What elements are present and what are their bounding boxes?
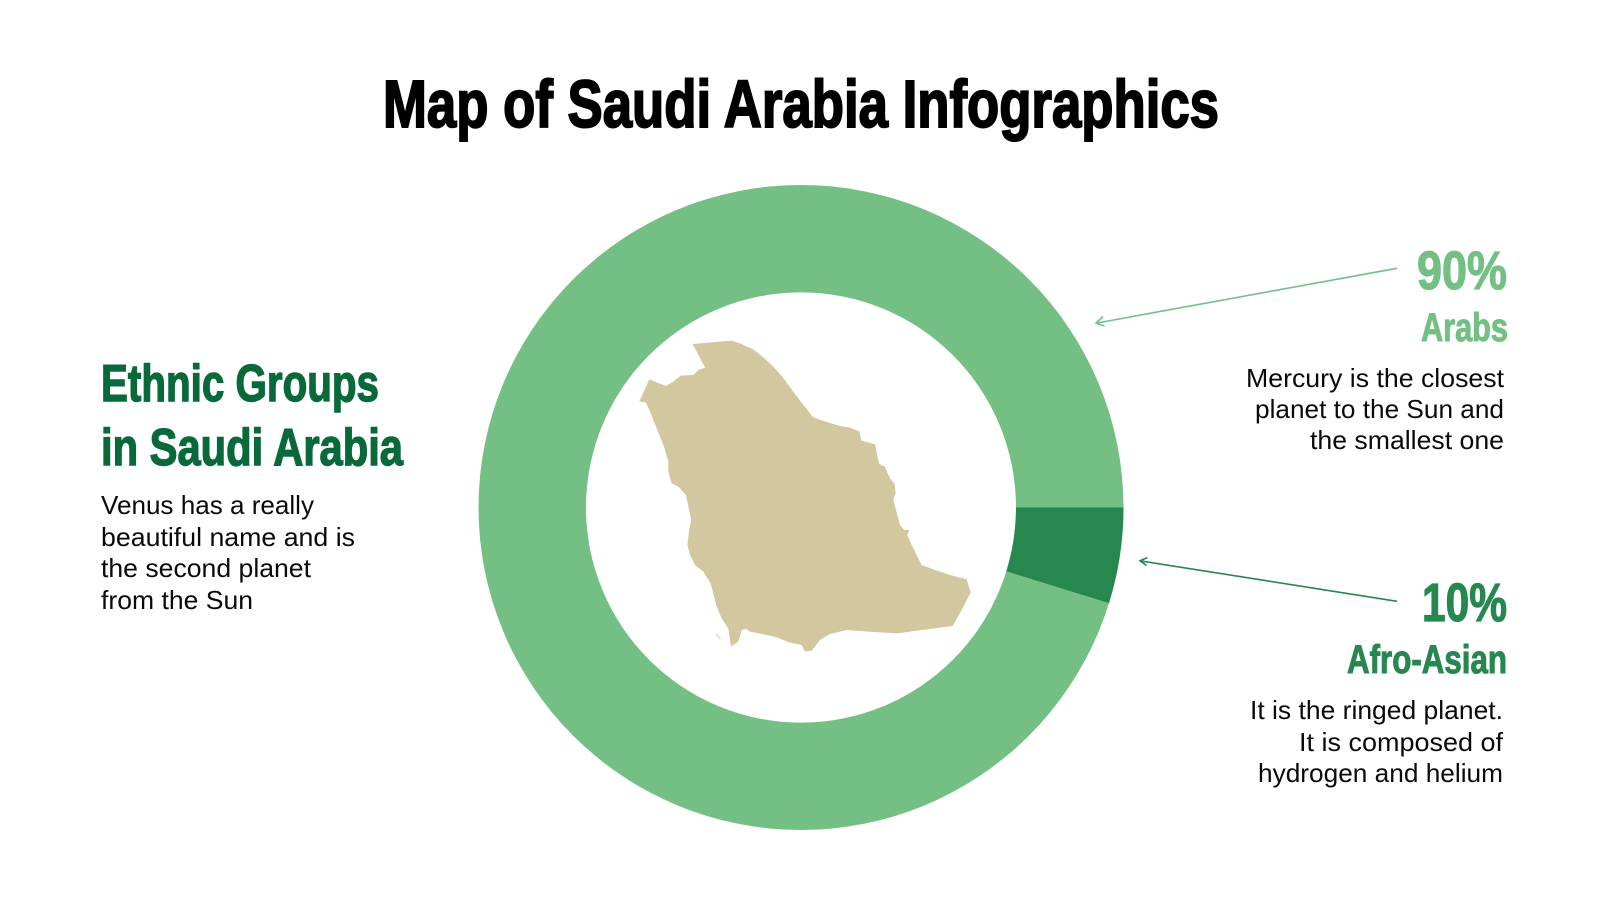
panel: ethnic groups intro bbox=[101, 355, 404, 615]
intro heading: Ethnic Groups bbox=[101, 355, 379, 413]
segment: Afro-Asian 10% bbox=[1006, 508, 1124, 603]
intro text: from the Sun bbox=[101, 585, 253, 615]
description: Afro-Asian: It is the ringed planet. bbox=[1250, 695, 1503, 725]
description: Afro-Asian bbox=[1250, 695, 1504, 788]
description: Arabs bbox=[1246, 363, 1505, 455]
value: 10%: 10% bbox=[1422, 573, 1507, 633]
intro text: the second planet bbox=[101, 553, 312, 583]
value: 90%: 90% bbox=[1417, 241, 1507, 301]
label: Arabs: Arabs bbox=[1421, 306, 1508, 350]
description: Afro-Asian: It is composed of bbox=[1299, 727, 1504, 757]
description: Afro-Asian: hydrogen and helium bbox=[1258, 758, 1503, 788]
intro text: Venus has a really bbox=[101, 490, 314, 520]
intro heading: in Saudi Arabia bbox=[101, 419, 404, 477]
title: Map of Saudi Arabia Infographics bbox=[383, 67, 1219, 142]
segment: Arabs 90% bbox=[478, 185, 1124, 830]
arrow: Arabs bbox=[1096, 268, 1397, 326]
panel: Afro-Asian bbox=[1250, 573, 1507, 788]
arrow: Afro-Asian bbox=[1140, 558, 1397, 601]
label: Afro-Asian: Afro-Asian bbox=[1347, 638, 1507, 682]
panel: Arabs bbox=[1246, 241, 1508, 455]
intro text: beautiful name and is bbox=[101, 522, 355, 552]
donut chart bbox=[478, 185, 1124, 830]
intro text bbox=[101, 490, 355, 615]
description: Arabs: Mercury is the closest bbox=[1246, 363, 1505, 393]
description: Arabs: the smallest one bbox=[1310, 425, 1504, 455]
description: Arabs: planet to the Sun and bbox=[1255, 394, 1504, 424]
intro heading bbox=[101, 355, 404, 477]
map of Saudi Arabia bbox=[639, 341, 971, 652]
